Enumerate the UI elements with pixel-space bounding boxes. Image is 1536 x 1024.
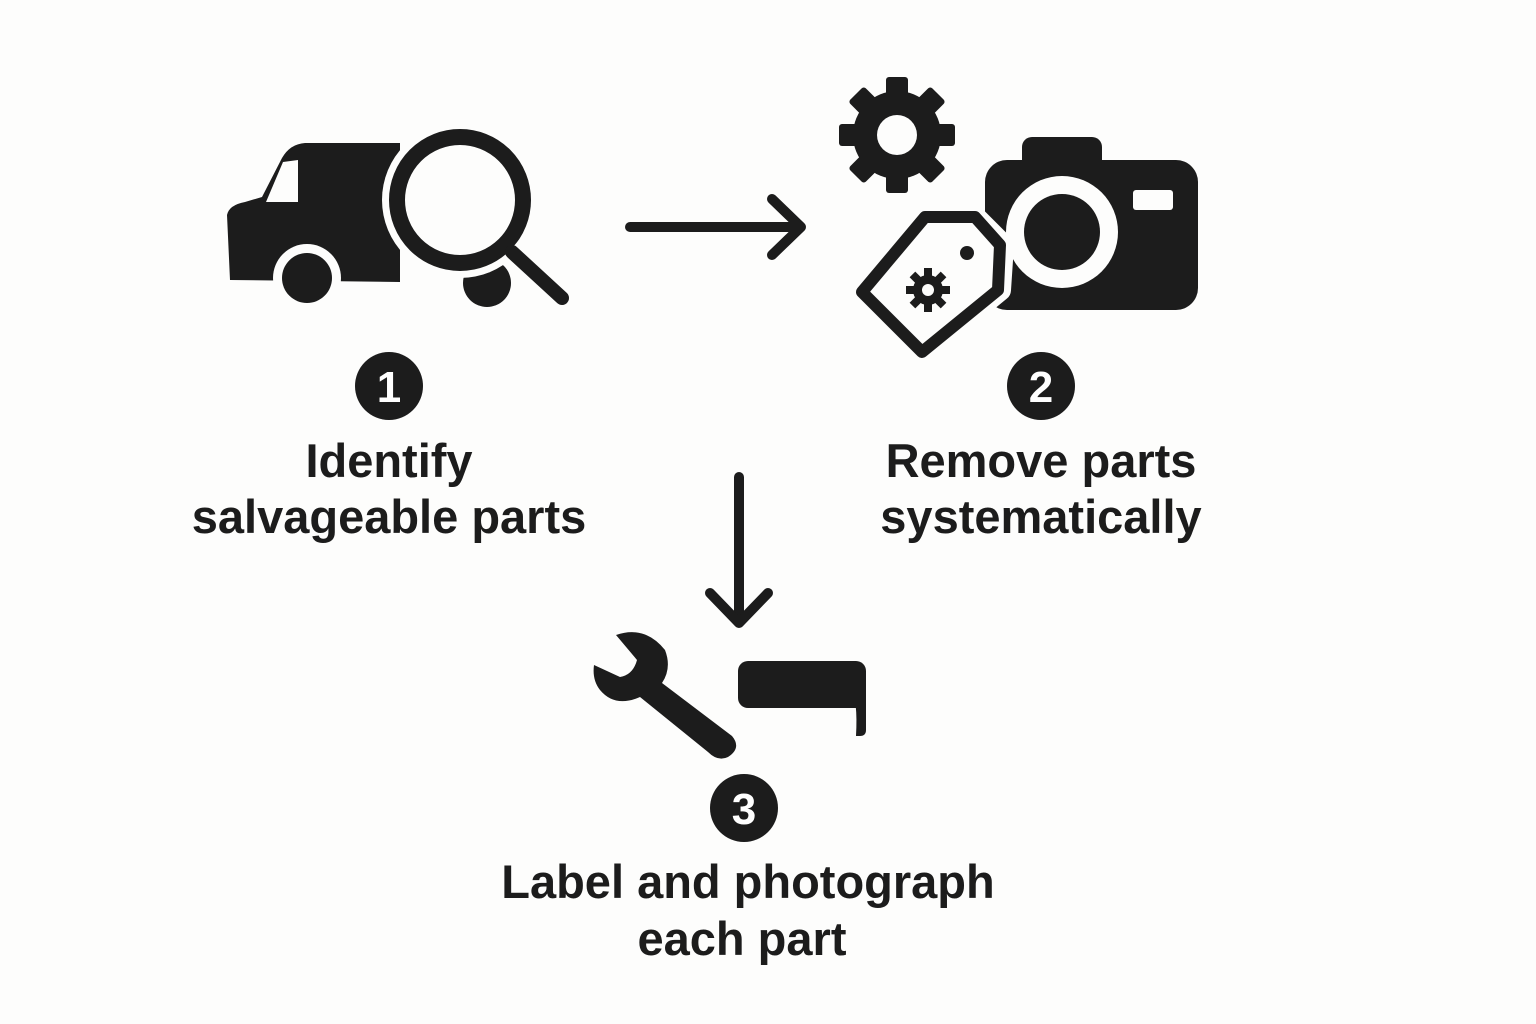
icon: gear, tag and camera bbox=[839, 77, 1198, 354]
text: step 1 label: Identify bbox=[305, 434, 473, 487]
icon: car with magnifier bbox=[227, 122, 562, 312]
badge: step 3 bbox=[710, 774, 778, 842]
arrow: down bbox=[710, 477, 768, 623]
text: step 3 label: each part bbox=[638, 912, 847, 965]
text: step 2 label: Remove parts bbox=[886, 434, 1196, 487]
badge: step 2 bbox=[1007, 352, 1075, 420]
text: step 3 label bbox=[501, 855, 995, 965]
badge: step 1 bbox=[355, 352, 423, 420]
badge: step 1: 1 bbox=[377, 363, 401, 412]
text: step 1 label: salvageable parts bbox=[192, 490, 586, 543]
icon: wrench and label bbox=[594, 632, 866, 759]
text: step 2 label bbox=[880, 434, 1202, 543]
badge: step 3: 3 bbox=[732, 785, 756, 834]
badge: step 2: 2 bbox=[1029, 363, 1053, 412]
text: step 1 label bbox=[192, 434, 586, 543]
text: step 3 label: Label and photograph bbox=[501, 855, 995, 908]
arrow: right bbox=[630, 199, 801, 255]
text: step 2 label: systematically bbox=[880, 490, 1202, 543]
